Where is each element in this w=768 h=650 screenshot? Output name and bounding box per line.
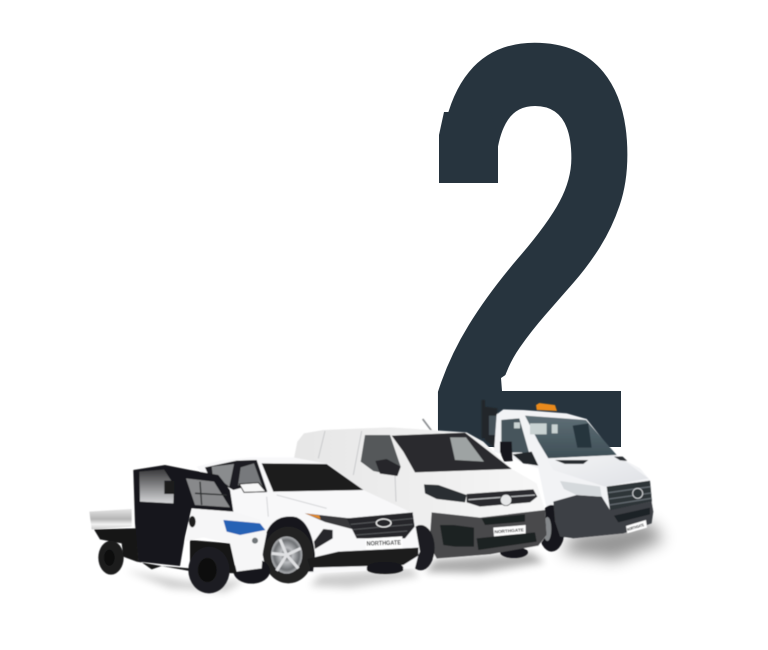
far wheel <box>500 547 528 558</box>
lower intake <box>477 532 537 550</box>
mirror <box>375 459 401 476</box>
vehicle: flatbed truck <box>482 400 653 552</box>
cab body <box>494 409 653 538</box>
front body <box>185 508 267 572</box>
headboard <box>482 400 497 450</box>
windscreen <box>525 416 617 458</box>
wheel <box>538 505 565 552</box>
background seen through windscreen <box>573 423 592 448</box>
upper intake <box>482 514 525 525</box>
hood <box>547 455 648 487</box>
panel lines <box>318 431 396 502</box>
number plate: NORTHGATE <box>366 539 401 548</box>
mirror <box>164 481 174 494</box>
chassis <box>94 528 237 573</box>
cab <box>133 465 233 566</box>
number plate <box>493 525 526 536</box>
window frame <box>205 460 267 492</box>
upper grille <box>467 489 537 507</box>
mirror <box>239 483 266 492</box>
side window rear <box>212 464 234 487</box>
badge <box>633 488 643 498</box>
fog light <box>314 529 333 549</box>
lower grille <box>614 508 650 522</box>
headlight <box>305 513 353 529</box>
left leg of the numeral <box>439 112 498 183</box>
front tyre <box>263 527 313 583</box>
grille <box>607 481 652 510</box>
lower wheel <box>367 562 403 573</box>
vehicle: white SUV <box>197 457 420 583</box>
body <box>197 457 420 573</box>
front fascia <box>307 512 418 573</box>
mirror <box>500 442 513 462</box>
far wheel <box>367 565 403 574</box>
grille mesh <box>351 518 413 535</box>
badge <box>500 494 512 506</box>
chrome bar <box>468 495 535 500</box>
windscreen glare <box>450 437 484 462</box>
masks trimming the numeral base <box>501 372 640 452</box>
side window <box>501 418 531 458</box>
side window front <box>238 463 263 489</box>
amber beacon <box>536 403 557 411</box>
headlamp <box>189 516 196 527</box>
hood crease <box>267 495 327 517</box>
vehicle: white van <box>293 419 547 570</box>
side window <box>361 435 401 476</box>
lower bumper <box>429 510 547 558</box>
headboard mesh <box>489 416 497 435</box>
windscreen <box>392 433 512 472</box>
vehicle: electric utility buggy <box>89 465 270 593</box>
blue stripe <box>223 520 265 535</box>
headlight <box>424 484 467 502</box>
door arm <box>513 452 538 466</box>
door window <box>139 469 174 503</box>
badge <box>376 519 391 527</box>
aerial <box>423 419 432 431</box>
rear window grid <box>514 422 558 434</box>
front wheel <box>188 547 230 593</box>
wheel arch <box>263 516 315 572</box>
windscreen <box>186 478 230 507</box>
indicator <box>305 513 321 519</box>
number plate: NORTHGATE <box>494 527 524 534</box>
front wheel <box>407 525 435 570</box>
bumper <box>553 495 653 538</box>
lower bumper <box>307 548 418 568</box>
round badge <box>252 538 258 544</box>
headlight <box>560 481 602 497</box>
grille slats <box>608 487 651 505</box>
number plate: NORTHGATE <box>626 522 645 532</box>
windscreen frame <box>195 482 227 505</box>
rear wheel <box>98 541 124 575</box>
hidden wheel <box>233 558 270 584</box>
windscreen <box>262 463 363 492</box>
ground shadows <box>125 522 664 592</box>
grille <box>347 512 415 538</box>
load bed <box>89 509 132 529</box>
hood vents <box>555 457 627 464</box>
fog housing <box>440 525 474 547</box>
van body <box>293 427 547 562</box>
alloy rim <box>271 536 302 574</box>
